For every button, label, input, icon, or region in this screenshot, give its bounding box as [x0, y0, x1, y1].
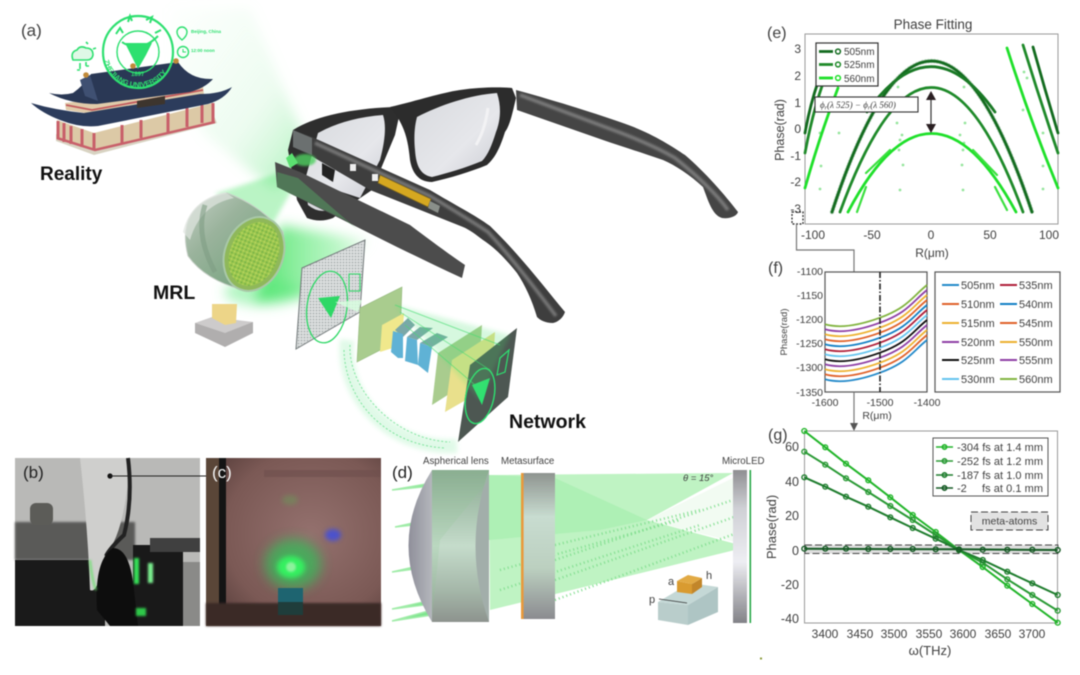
y tick labels: -1350 [796, 387, 823, 399]
aspherical lens [408, 470, 489, 622]
legend f: 505nm [961, 280, 995, 292]
glasses [275, 87, 738, 323]
legend e: 505nm [844, 47, 875, 58]
label Reality: Reality [40, 164, 103, 185]
microLED [733, 470, 751, 623]
legend g: -252 fs at 1.2 mm [957, 456, 1043, 468]
panel: d optical ray diagram [392, 456, 765, 625]
meta-atoms tag [971, 512, 1048, 530]
metasurface plate [296, 240, 365, 349]
green light beam from reality to glasses [170, 8, 305, 190]
callout: phase difference: r [825, 106, 828, 112]
line: -304 fs [802, 429, 1060, 625]
y axis label: Phase(rad) [773, 99, 787, 161]
legend f: 530nm [961, 374, 995, 386]
callout: phase difference: r [868, 106, 871, 112]
green rays [392, 473, 747, 621]
y tick labels: 60 [785, 440, 799, 454]
callout: phase difference [815, 97, 918, 112]
green LED glow [90, 558, 153, 616]
y tick labels: -1300 [796, 362, 823, 374]
panel label e: (e) [767, 25, 787, 42]
x tick labels: -1500 [867, 397, 894, 409]
line: -187 fs [802, 475, 1060, 597]
hologram seal: Zhejiang University [101, 13, 175, 90]
x tick labels: 3650 [985, 627, 1012, 641]
panel: b photo of glasses [15, 458, 207, 626]
line: -252 fs [802, 449, 1060, 613]
x tick labels: 3500 [881, 627, 908, 641]
legend f: 550nm [1019, 337, 1053, 349]
network layers [357, 287, 517, 442]
panel: a AR glasses system [21, 13, 738, 454]
panel label a: (a) [21, 21, 42, 40]
x tick labels [812, 627, 1046, 641]
detached temple waveguide [275, 162, 465, 278]
legend g: -304 fs at 1.4 mm [957, 442, 1043, 454]
legend g: -187 fs at 1.0 mm [957, 470, 1043, 482]
legend e [816, 43, 878, 86]
legend f: 515nm [961, 318, 995, 330]
curves [825, 285, 927, 381]
hologram seal: Zhejiang University: ZHEJIANG UNIVERSITY [104, 59, 166, 88]
blue glow [325, 529, 341, 541]
x tick labels: -1400 [914, 397, 941, 409]
green hologram glow [265, 495, 321, 589]
hologram seal: Zhejiang University: 1897 [131, 72, 145, 78]
x axis label: ω(THz) [909, 643, 951, 658]
y tick labels: -1200 [796, 314, 823, 326]
x tick labels: 3700 [1019, 627, 1046, 641]
y tick labels: 20 [785, 509, 799, 523]
y axis label: Phase(rad) [764, 495, 779, 559]
y tick labels: -40 [781, 612, 799, 626]
y tick labels: -20 [781, 578, 799, 592]
legend f: 535nm [1019, 280, 1053, 292]
callout: phase difference: (λ 560) [870, 100, 896, 110]
x tick labels: -100 [801, 228, 825, 242]
legend f: 555nm [1019, 355, 1053, 367]
lens labels: Aspherical lens [423, 456, 489, 467]
arrow from f to g [850, 392, 858, 431]
y tick labels: -1100 [797, 266, 823, 278]
label MRL: MRL [153, 282, 195, 304]
legend f: 510nm [961, 299, 995, 311]
panel label g: (g) [768, 427, 788, 444]
legend e: 560nm [844, 74, 875, 85]
x tick labels [801, 228, 1059, 242]
scattered data points [832, 61, 1032, 212]
callout line from b to c [107, 473, 207, 479]
legend f: 520nm [961, 337, 995, 349]
meta-atoms tag: meta-atoms [982, 516, 1037, 528]
axes box [805, 34, 1058, 224]
x tick labels: 50 [983, 228, 997, 242]
hologram icon: location and clock: 12:00 noon [191, 48, 215, 53]
y tick labels: 2 [794, 69, 801, 83]
arrow: phase difference [926, 91, 936, 133]
x tick labels: 3600 [950, 627, 977, 641]
x tick labels: 3550 [916, 627, 943, 641]
x axis label: R(μm) [915, 246, 949, 260]
y tick labels: -1150 [797, 290, 823, 302]
lens labels: Metasurface [501, 456, 554, 467]
x axis label: R(μm) [862, 410, 892, 422]
y tick labels: 0 [792, 544, 799, 558]
callout: phase difference: ϕ [820, 100, 825, 110]
panel: c holographic projection photo [206, 458, 381, 626]
legend e: 525nm [844, 60, 875, 71]
chart g: phase vs frequency [764, 427, 1060, 658]
axes box [804, 431, 1058, 623]
panel label b: (b) [23, 463, 44, 482]
panel label f: (f) [768, 260, 783, 277]
callout: phase difference: (λ 525) − ϕ [827, 100, 868, 110]
y tick labels: -2 [790, 175, 801, 189]
meta-atom inset: a [668, 576, 675, 588]
y tick labels: 40 [785, 475, 799, 489]
sample on stage [278, 588, 303, 615]
fitted curves [805, 45, 1058, 212]
legend f: 540nm [1019, 299, 1053, 311]
panel label c: (c) [212, 463, 232, 482]
building: reality [31, 58, 232, 155]
icon: meta-atom cube [195, 304, 253, 347]
label theta: θ = 15° [683, 473, 714, 484]
legend f: 525nm [961, 355, 995, 367]
x tick labels: 100 [1039, 228, 1059, 242]
axes box [825, 272, 927, 392]
y tick labels: 0 [794, 122, 801, 136]
y tick labels: 3 [794, 42, 801, 56]
lens labels: MicroLED [722, 456, 765, 467]
connector from e to f [796, 224, 854, 272]
y axis label: Phase(rad) [779, 308, 790, 356]
metasurface block [521, 473, 555, 619]
legend f: 545nm [1019, 318, 1053, 330]
y tick labels [790, 42, 801, 216]
x tick labels: 3400 [812, 627, 839, 641]
y tick labels: -1 [790, 149, 801, 163]
hologram icon: weather [72, 42, 96, 70]
hologram icon: location and clock [177, 27, 221, 58]
legend g: fs at 0.1 mm [982, 483, 1043, 495]
meta-atom inset: h [706, 570, 712, 582]
legend g: -2 [957, 483, 967, 495]
gold flex strip [378, 175, 431, 207]
beam: lens to metasurface [224, 225, 368, 306]
meta-atom inset: p [649, 594, 655, 606]
x tick labels: -1600 [812, 397, 839, 409]
dashed zoom region [792, 212, 803, 224]
panel label d: (d) [392, 463, 413, 482]
meta-atom dashed band [805, 545, 1058, 554]
title: Phase Fitting [894, 17, 972, 32]
y tick labels: -3 [790, 202, 801, 216]
x tick labels: 0 [928, 228, 935, 242]
x tick labels: 3450 [847, 627, 874, 641]
legend f: 560nm [1019, 374, 1053, 386]
hologram icon: location and clock: Beijing, China [191, 29, 221, 34]
beam: lens to glasses [215, 168, 300, 225]
lens labels [423, 456, 765, 467]
y tick labels: 1 [794, 96, 801, 110]
chart e: phase fitting [767, 17, 1059, 272]
legend f [935, 272, 1060, 392]
neural network arc [344, 340, 457, 448]
y tick labels: -1250 [796, 338, 823, 350]
x tick labels: -50 [863, 228, 881, 242]
meta-atom inset [649, 570, 718, 625]
y tick labels [796, 266, 823, 399]
x tick labels [812, 397, 941, 409]
legend g [933, 438, 1048, 496]
y tick labels [781, 440, 799, 626]
chart f: phase vs radius [768, 260, 1060, 431]
stray dot [760, 658, 762, 660]
label Network: Network [509, 411, 586, 433]
line: -2 fs [802, 546, 1060, 552]
MRL lens [183, 192, 295, 300]
